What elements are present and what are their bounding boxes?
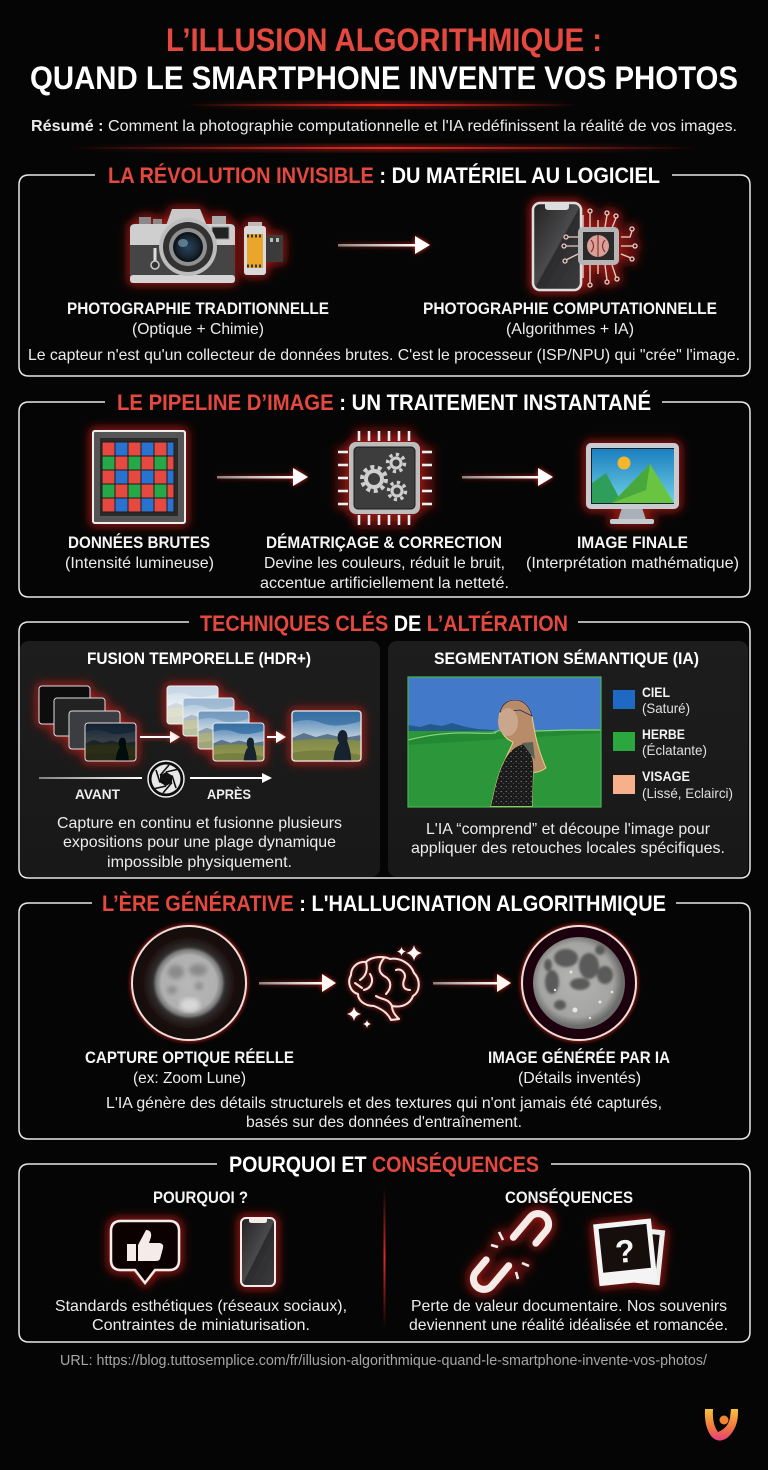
icon: monitor	[586, 443, 679, 524]
text: pourquoi description: Contraintes de miniaturisation.	[92, 1317, 310, 1334]
arrow: blur to brain	[259, 974, 336, 992]
heading: fusion: FUSION TEMPORELLE (HDR+)	[87, 649, 311, 668]
timeline: after	[190, 773, 272, 783]
heading: segmentation: SEGMENTATION SÉMANTIQUE (IA)	[434, 649, 699, 668]
subheading: conséquences: CONSÉQUENCES	[505, 1188, 633, 1207]
heading: pourquoi et conséquences: POURQUOI ET CONSÉQUENCES	[229, 1152, 539, 1177]
arrow: brain to generated	[433, 974, 511, 992]
arrow: raw to demosaic	[217, 468, 308, 486]
label: computational photography: PHOTOGRAPHIE COMPUTATIONNELLE	[423, 299, 717, 318]
label: raw data	[65, 533, 214, 572]
label: traditional photography: (Optique + Chimie)	[132, 321, 264, 338]
legend: ciel: (Saturé)	[642, 700, 690, 716]
icon: vintage camera	[130, 209, 235, 283]
label: generated image	[488, 1048, 670, 1087]
text: pourquoi description	[55, 1298, 347, 1334]
label: final image: (Interprétation mathématique)	[526, 555, 739, 572]
label: raw data: DONNÉES BRUTES	[68, 533, 210, 552]
sub-panel: segmentation sémantique	[388, 641, 748, 877]
photo: merged result	[292, 711, 361, 761]
text: generative description: basés sur des données d'entraînement.	[246, 1114, 522, 1131]
label: generated image: IMAGE GÉNÉRÉE PAR IA	[488, 1048, 670, 1067]
panel: techniques clés	[19, 611, 750, 878]
text: conséquences description: deviennent une réalité idéalisée et romancée.	[409, 1317, 728, 1334]
label: demosaicing: DÉMATRIÇAGE & CORRECTION	[266, 533, 502, 552]
panel: la révolution invisible	[19, 163, 750, 376]
legend: herbe: (Éclatante)	[642, 742, 707, 758]
legend: ciel: CIEL	[642, 684, 670, 700]
text: hdr description: Capture en continu et fusionne plusieurs	[57, 815, 342, 832]
arrow: stack two	[267, 731, 286, 743]
text: generative description: L'IA génère des détails structurels et des textures qui n'ont jamais été capturés,	[106, 1095, 662, 1112]
title	[30, 22, 738, 96]
photo stack: underexposed	[39, 686, 136, 761]
text: segmentation description: appliquer des retouches locales spécifiques.	[411, 840, 725, 857]
heading: générative: L’ÈRE GÉNÉRATIVE : L'HALLUCINATION ALGORITHMIQUE	[102, 891, 666, 916]
legend: visage: (Lissé, Eclairci)	[642, 785, 733, 801]
text: sensor explanation: Le capteur n'est qu'un collecteur de données brutes. C'est le processeur (ISP/NPU) qui "crée" l'image.	[28, 347, 740, 364]
text: segmentation description	[411, 821, 725, 857]
text: generative description	[106, 1095, 662, 1131]
icon: blurry moon	[132, 926, 246, 1040]
label: final image: IMAGE FINALE	[577, 533, 688, 552]
text: conséquences description: Perte de valeur documentaire. Nos souvenirs	[411, 1298, 727, 1315]
heading: révolution: LA RÉVOLUTION INVISIBLE : DU MATÉRIEL AU LOGICIEL	[108, 163, 660, 188]
label: raw data: (Intensité lumineuse)	[65, 555, 214, 572]
icon: processor with gears	[338, 431, 432, 525]
label: final image	[526, 533, 739, 572]
icon: bayer sensor	[93, 431, 185, 523]
icon: phone with AI chip	[533, 203, 637, 290]
legend: herbe	[613, 726, 707, 758]
source url: URL: https://blog.tuttosemplice.com/fr/illusion-algorithmique-quand-le-smartphone-invente-vos-photos/	[60, 1353, 708, 1369]
text: hdr description: expositions pour une plage dynamique	[63, 834, 336, 851]
label: après: APRÈS	[207, 786, 251, 802]
arrow: demosaic to final	[462, 468, 553, 486]
label: avant: AVANT	[75, 786, 120, 802]
summary: Résumé : Comment la photographie computationnelle et l'IA redéfinissent la réalité de vos images.	[31, 118, 737, 135]
arrow: stack one	[140, 731, 180, 743]
text: hdr description: impossible physiquement.	[107, 854, 292, 871]
legend: visage: VISAGE	[642, 768, 690, 784]
panel: l'ère générative	[19, 891, 750, 1139]
icon: photo with question mark: ?	[614, 1232, 637, 1270]
heading: techniques: TECHNIQUES CLÉS DE L’ALTÉRATION	[200, 611, 568, 636]
icon: broken link	[469, 1209, 553, 1294]
segmented photo	[408, 677, 601, 807]
label: real capture	[85, 1048, 294, 1087]
label: traditional photography: PHOTOGRAPHIE TRADITIONNELLE	[67, 299, 329, 318]
icon: AI brain with sparkles	[347, 945, 422, 1028]
arrow: traditional to computational	[338, 236, 430, 254]
text: pourquoi description: Standards esthétiques (réseaux sociaux),	[55, 1298, 347, 1315]
legend: visage	[613, 768, 733, 801]
icon: smartphone	[241, 1218, 275, 1286]
label: demosaicing: Devine les couleurs, réduit le bruit,	[264, 555, 505, 572]
label: demosaicing: accentue artificiellement la netteté.	[260, 575, 509, 592]
label: computational photography	[423, 299, 717, 338]
legend: herbe: HERBE	[642, 726, 685, 742]
label: demosaicing	[260, 533, 509, 592]
label: traditional photography	[67, 299, 329, 338]
label: generated image: (Détails inventés)	[518, 1070, 641, 1087]
text: hdr description	[57, 815, 342, 871]
timeline: before	[39, 777, 142, 779]
heading: pipeline: LE PIPELINE D’IMAGE : UN TRAITEMENT INSTANTANÉ	[117, 390, 651, 415]
label: real capture: CAPTURE OPTIQUE RÉELLE	[85, 1048, 294, 1067]
icon: film roll	[244, 222, 283, 275]
photo stack: overexposed	[167, 686, 264, 761]
icon: sharp moon	[522, 926, 636, 1040]
panel: pourquoi et conséquences	[19, 1152, 750, 1342]
text: segmentation description: L'IA “comprend” et découpe l'image pour	[426, 821, 711, 838]
label: real capture: (ex: Zoom Lune)	[133, 1070, 246, 1087]
icon: thumbs up bubble	[111, 1221, 179, 1283]
icon: aperture	[148, 761, 184, 797]
sub-panel: fusion temporelle	[20, 641, 380, 877]
title: L’ILLUSION ALGORITHMIQUE :	[166, 22, 602, 58]
label: computational photography: (Algorithmes + IA)	[506, 321, 634, 338]
icon: photo with question mark	[593, 1218, 665, 1286]
legend: ciel	[613, 684, 690, 716]
text: conséquences description	[409, 1298, 728, 1334]
logo	[705, 1409, 738, 1441]
panel: le pipeline d'image	[19, 390, 750, 597]
subheading: pourquoi: POURQUOI ?	[153, 1188, 248, 1207]
